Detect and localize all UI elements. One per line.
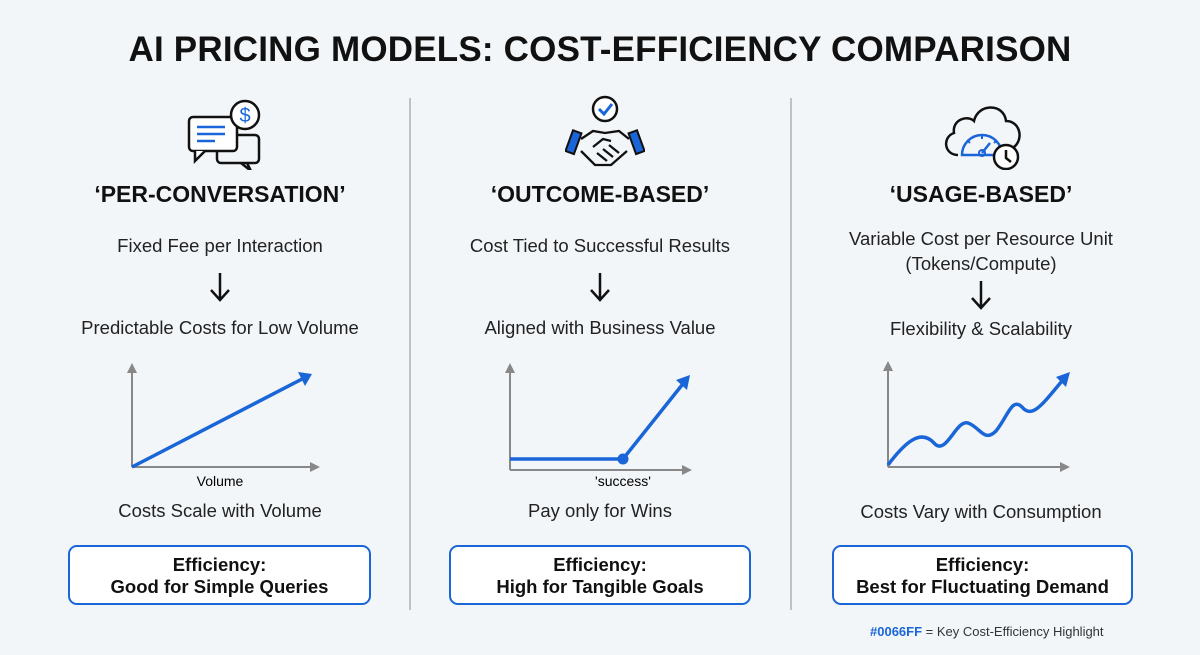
callout: High for Tangible Goals — [496, 576, 704, 597]
icon: chat with dollar — [188, 100, 260, 170]
callout — [449, 545, 751, 605]
chart: step — [505, 363, 692, 488]
arrow — [971, 281, 991, 310]
heading: ‘PER-CONVERSATION’ — [94, 181, 346, 207]
icon: cloud gauge — [944, 106, 1021, 170]
icon: handshake — [565, 96, 645, 166]
text: Cost Tied to Successful Results — [470, 235, 730, 256]
panel: outcome-based — [470, 96, 730, 521]
text — [849, 228, 1113, 274]
callout: Good for Simple Queries — [111, 576, 328, 597]
callout: Best for Fluctuating Demand — [856, 576, 1109, 597]
text: Pay only for Wins — [528, 500, 672, 521]
panel: per-conversation — [81, 100, 359, 521]
text: Variable Cost per Resource Unit — [849, 228, 1113, 249]
callout: Efficiency: — [553, 554, 647, 575]
heading: ‘OUTCOME-BASED’ — [491, 181, 709, 207]
callout: Efficiency: — [173, 554, 266, 575]
chart: linear — [127, 363, 320, 488]
callout: Efficiency: — [936, 554, 1029, 575]
text: (Tokens/Compute) — [905, 253, 1057, 274]
text: Fixed Fee per Interaction — [117, 235, 323, 256]
legend: #0066FF = Key Cost-Efficiency Highlight — [870, 624, 1104, 639]
panel: usage-based — [849, 106, 1113, 522]
text: Predictable Costs for Low Volume — [81, 317, 359, 338]
heading: ‘USAGE-BASED’ — [890, 181, 1072, 207]
text: Aligned with Business Value — [484, 317, 716, 338]
arrow — [210, 273, 230, 302]
chart: wave — [883, 361, 1070, 472]
arrow — [590, 273, 610, 302]
callout — [832, 545, 1133, 605]
callout — [68, 545, 371, 605]
title: AI PRICING MODELS: COST-EFFICIENCY COMPARISON — [128, 30, 1072, 69]
text: Flexibility & Scalability — [890, 318, 1072, 339]
text: Costs Vary with Consumption — [860, 501, 1102, 522]
text: Costs Scale with Volume — [118, 500, 322, 521]
icon: chat with dollar: $ — [239, 105, 251, 127]
